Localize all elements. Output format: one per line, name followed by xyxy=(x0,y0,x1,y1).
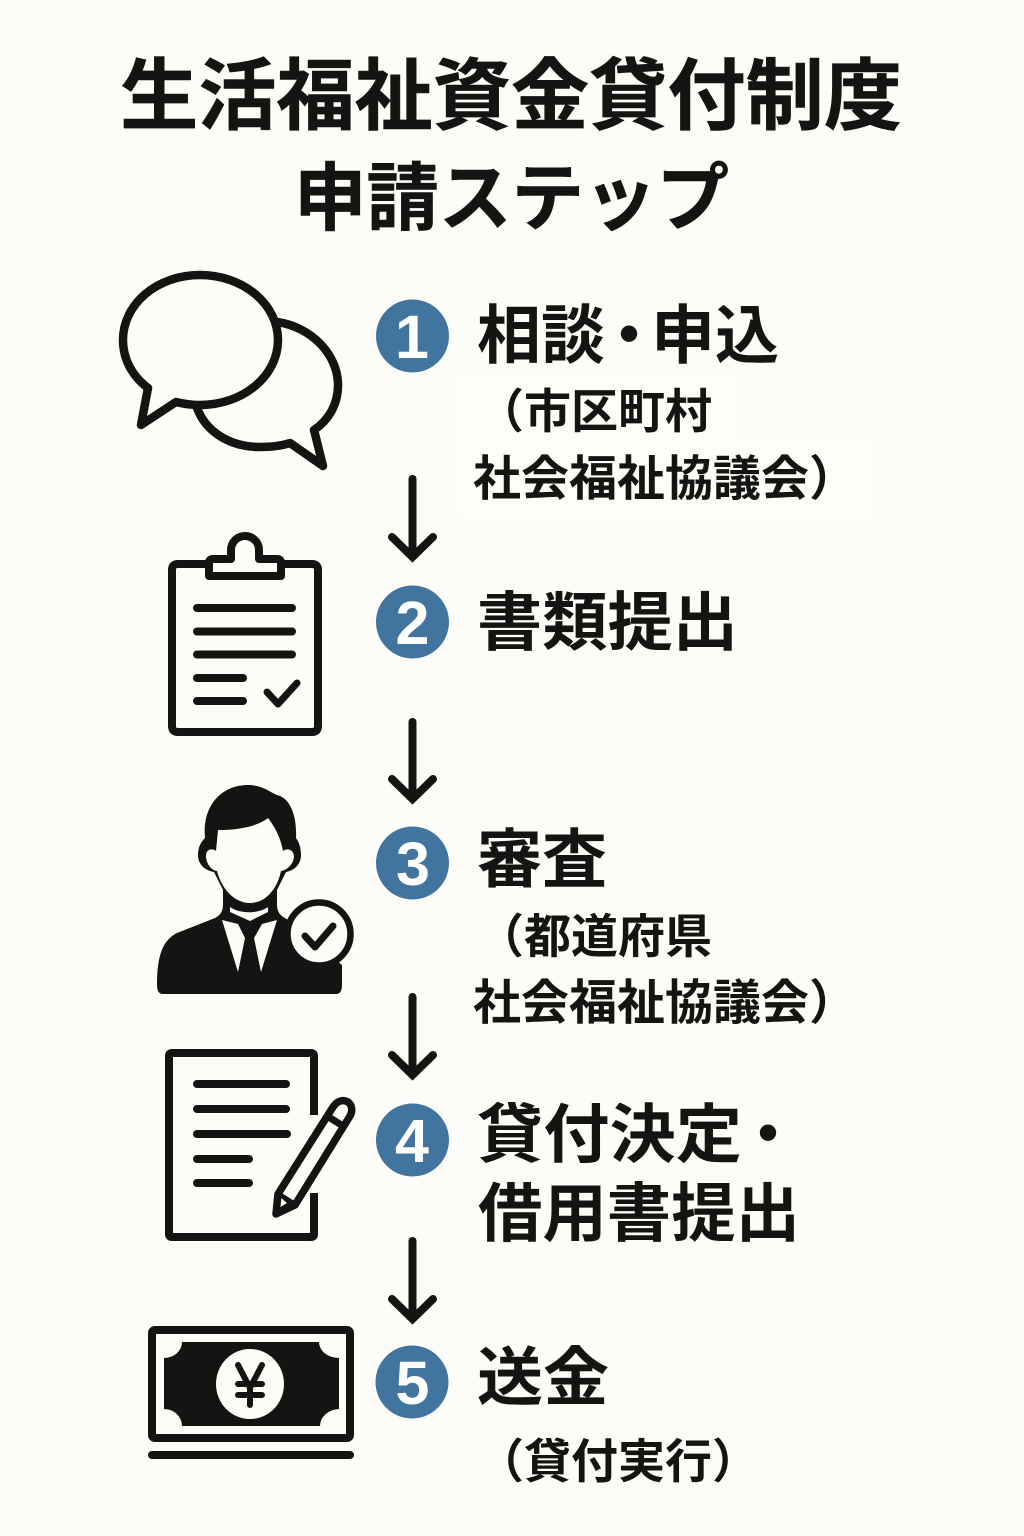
step 3 label: 審査 xyxy=(477,824,607,896)
step 1 note background xyxy=(455,375,875,517)
title xyxy=(120,52,902,240)
title: 生活福祉資金貸付制度 xyxy=(120,52,902,140)
step 5 badge xyxy=(376,1346,448,1418)
icon: speech bubbles xyxy=(123,275,338,466)
step 5 badge: 5 xyxy=(396,1349,429,1417)
step 1 label: 申込 xyxy=(651,300,779,372)
step 3 note background xyxy=(447,900,875,1042)
icon: document and pen xyxy=(169,1053,352,1237)
arrow 1 to 2 xyxy=(392,479,433,557)
step 5 note background xyxy=(470,1425,770,1497)
arrow 4 to 5 xyxy=(392,1241,433,1319)
step 3 note xyxy=(473,910,857,1030)
title: 申請ステップ xyxy=(294,157,729,240)
step 2 label: 書類提出 xyxy=(477,587,738,659)
step 1 note: （市区町村 xyxy=(477,385,712,438)
step 1 label xyxy=(477,300,779,372)
step 1 badge: 1 xyxy=(395,303,429,371)
step 1 label: ・ xyxy=(597,300,661,372)
step 5 note: （貸付実行） xyxy=(477,1435,759,1488)
step 1 label: 相談 xyxy=(477,300,605,372)
step 3 note: 社会福祉協議会） xyxy=(473,977,857,1030)
step 3 badge: 3 xyxy=(396,830,430,898)
step 2 badge xyxy=(376,586,449,658)
arrow 2 to 3 xyxy=(392,722,433,799)
step 2 badge: 2 xyxy=(396,589,429,657)
step 4 label: ・ xyxy=(736,1099,800,1171)
step 4 label: 貸付決定 xyxy=(477,1099,742,1171)
icon: reviewer with check xyxy=(157,785,350,994)
step 3 note: （都道府県 xyxy=(477,910,712,963)
icon: yen banknote xyxy=(148,1330,354,1459)
step 4 label: 借用書提出 xyxy=(478,1178,800,1250)
step 4 label xyxy=(477,1099,800,1250)
icon: clipboard xyxy=(172,536,318,732)
step 5 label: 送金 xyxy=(477,1342,609,1414)
step 3 badge xyxy=(376,826,449,900)
step 1 note: 社会福祉協議会） xyxy=(473,453,857,506)
step 1 note xyxy=(473,385,857,506)
step 4 badge: 4 xyxy=(395,1107,429,1175)
step 1 badge xyxy=(376,300,449,372)
step 4 badge xyxy=(376,1104,449,1176)
arrow 3 to 4 xyxy=(392,997,433,1075)
